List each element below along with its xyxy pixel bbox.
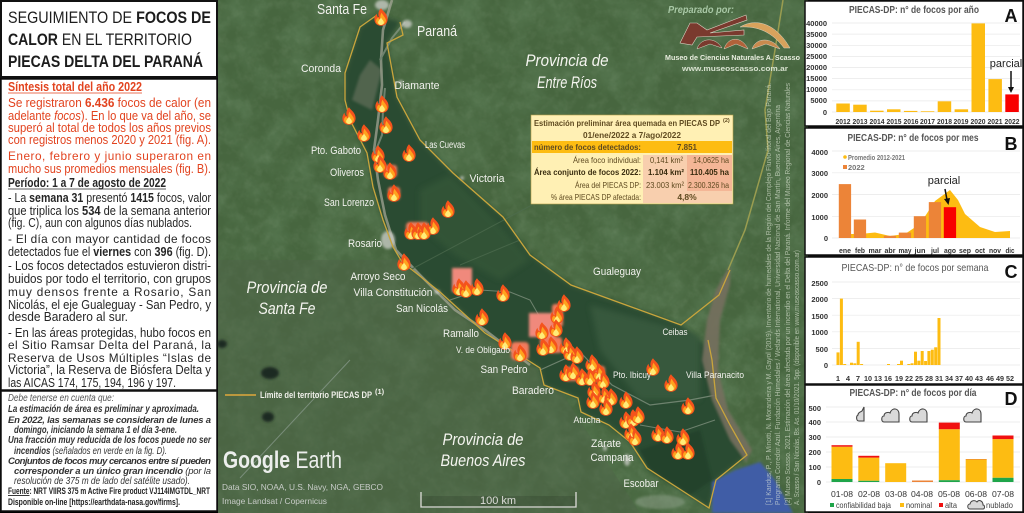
panel: notes and source: Fuente: NRT VIIRS 375 m Active Fire product VJ114IMGTDL_NRT bbox=[8, 486, 210, 496]
legend: boundary line: Límite del territorio PIECAS DP bbox=[260, 390, 372, 400]
panel: title bbox=[1, 1, 217, 77]
text block: weekly bullets: Victoria”, la Reserva de Biósfera Delta y bbox=[8, 363, 212, 377]
panel: notes and source bbox=[1, 391, 217, 511]
info table: estimated burned area bbox=[531, 115, 733, 204]
panel: notes and source: incendios (señalados en verde en la fig. D). bbox=[14, 445, 167, 457]
text block: weekly bullets: las AICAS 174, 175, 194, 196 y 197. bbox=[8, 376, 176, 390]
map labels: cities and provinces: Gualeguay bbox=[593, 266, 641, 278]
map labels: cities and provinces: Escobar bbox=[624, 478, 659, 490]
text block: annual synthesis paragraphs: mucho sus promedios mensuales (fig. B). bbox=[8, 162, 211, 176]
bar chart: years bbox=[836, 23, 1019, 112]
legend: confidence and cloud bbox=[830, 501, 1014, 510]
panel B: focos por mes bbox=[805, 128, 1023, 255]
bar chart: 2022 months bbox=[839, 184, 956, 238]
axis labels: weeks: 4 bbox=[846, 374, 851, 383]
info table: estimated burned area: número de focos detectados: bbox=[534, 142, 641, 152]
text block: weekly bullets: Reserva de Usos Múltiples “Islas de bbox=[8, 351, 211, 365]
axis labels: days: 05-08 bbox=[938, 489, 960, 499]
axis labels: days: 01-08 bbox=[831, 489, 853, 499]
map labels: cities and provinces: Santa Fe bbox=[317, 1, 367, 18]
scale bar: 100 km: 100 km bbox=[480, 495, 516, 507]
vertical references text: [2] Museo Scasso. 2021. Estimación del área afectada por un incendio en el Delta del Paraná. Informe del Museo Regional de Ciencias Naturales bbox=[785, 83, 792, 505]
axis labels: weeks: 16 bbox=[884, 374, 892, 383]
text block: weekly bullets: buidos por todo el territorio, con grupos bbox=[8, 272, 211, 286]
axis labels: weeks: 46 bbox=[986, 374, 994, 383]
axis labels: years: 2018 bbox=[937, 117, 952, 126]
map labels: cities and provinces: Arroyo Seco bbox=[350, 271, 406, 283]
annotation: parcial arrow: parcial bbox=[928, 175, 960, 187]
map labels: cities and provinces: Campana bbox=[590, 452, 634, 464]
map labels: cities and provinces: San Nicolás bbox=[396, 303, 448, 315]
panel: notes and source: Disponible on-line [https://earthdata-nasa.gov/firms]. bbox=[8, 497, 180, 507]
axis labels: weeks: 22 bbox=[905, 374, 913, 383]
panel A: focos por año: 30000 bbox=[806, 41, 827, 50]
annotation: parcial arrow: parcial bbox=[990, 58, 1022, 70]
text block: weekly bullets: detectados fue el viernes con 396 (fig. D). bbox=[8, 245, 211, 259]
axis labels: weeks bbox=[836, 374, 1014, 383]
panel: notes and source: Una fracción muy reducida de los focos puede no ser bbox=[8, 434, 212, 446]
axis labels: days bbox=[831, 489, 1014, 499]
map labels: cities and provinces: Ramallo bbox=[443, 328, 479, 340]
map labels: cities and provinces: Santa Fe bbox=[258, 299, 316, 318]
text block: weekly bullets: que triplica los 534 de la semana anterior bbox=[8, 204, 211, 218]
fire markers bbox=[342, 8, 695, 460]
axis labels: weeks: 34 bbox=[945, 374, 954, 383]
axis labels: weeks: 13 bbox=[874, 374, 882, 383]
panel B: focos por mes: B bbox=[1004, 134, 1018, 154]
panel D: focos por día: 300 bbox=[808, 433, 821, 442]
icons: cloudy days bbox=[857, 407, 981, 422]
panel: notes and source: domingo, iniciando la semana 1 el día 3-ene. bbox=[14, 424, 177, 436]
axis labels: weeks: 7 bbox=[856, 374, 860, 383]
info table: estimated burned area: 4,8% bbox=[677, 192, 697, 202]
axis labels: years: 2014 bbox=[870, 117, 885, 126]
panel: notes and source: Debe tenerse en cuenta que: bbox=[8, 392, 114, 404]
panel A: focos por año: 40000 bbox=[806, 19, 827, 28]
info table: estimated burned area: 110.405 ha bbox=[690, 167, 729, 177]
panel C: focos por semana: C bbox=[1004, 262, 1018, 282]
info table: estimated burned area: (2) bbox=[723, 118, 730, 124]
logo shape: brown animal bbox=[680, 15, 747, 45]
panel: title: CALOR EN EL TERRITORIO bbox=[8, 30, 192, 49]
axis labels: years: 2021 bbox=[988, 117, 1002, 126]
map labels: cities and provinces: Villa Constitución bbox=[354, 287, 432, 299]
Google Earth watermark and credits: Data SIO, NOAA, U.S. Navy, NGA, GEBCO bbox=[222, 482, 383, 492]
credit logo: Museo Scasso bbox=[665, 4, 800, 73]
map labels: cities and provinces: San Pedro bbox=[480, 364, 528, 376]
info table: estimated burned area: 23.003 km² bbox=[646, 180, 684, 190]
stacked bar chart: days bbox=[832, 423, 1014, 482]
panel D: focos por día: PIECAS-DP: n° de focos por día bbox=[850, 387, 977, 399]
text block: annual synthesis paragraphs: Se registraron 6.436 focos de calor (en bbox=[8, 96, 211, 110]
axis labels: weeks: 10 bbox=[864, 374, 872, 383]
map labels: cities and provinces: Pto. Gaboto bbox=[311, 145, 361, 157]
panel: title: PIECAS DELTA DEL PARANÁ bbox=[8, 52, 203, 71]
axis labels: months: dic bbox=[1006, 246, 1014, 255]
axis labels: years: 2012 bbox=[836, 117, 850, 126]
text block: annual synthesis paragraphs bbox=[8, 96, 211, 176]
panel: notes and source: corresponder a un único gran incendio (por la bbox=[14, 466, 211, 477]
Google Earth watermark and credits: Image Landsat / Copernicus bbox=[222, 496, 327, 506]
axis labels: weeks: 49 bbox=[996, 374, 1004, 383]
panel C: focos por semana bbox=[805, 257, 1023, 384]
text block: weekly bullets: muy densos frente a Rosario, San bbox=[8, 285, 211, 299]
text block: annual synthesis paragraphs: adelante focos). En lo que va del año, se bbox=[8, 109, 211, 123]
map labels: cities and provinces: Entre Ríos bbox=[537, 73, 597, 92]
panel C: focos por semana: 500 bbox=[815, 345, 828, 354]
text block: weekly bullets: (fig. C), aun con algunos días nublados. bbox=[8, 216, 192, 230]
axis labels: months: oct bbox=[975, 246, 985, 255]
text block: weekly bullets: - El día con mayor cantidad de focos bbox=[8, 232, 211, 246]
panel D: focos por día bbox=[805, 385, 1023, 512]
map labels: cities and provinces: Atucha bbox=[574, 415, 601, 426]
Google Earth watermark and credits: Google Earth bbox=[223, 447, 342, 474]
text block: annual synthesis paragraphs: con registros menos 2020 y 2021 (fig. A). bbox=[8, 133, 211, 147]
Google Earth watermark and credits bbox=[222, 447, 383, 506]
axis labels: months: ago bbox=[944, 246, 956, 255]
axis labels: years: 2022 bbox=[1004, 117, 1020, 126]
panel: notes and source: Conjuntos de focos muy cercanos entre sí pueden bbox=[8, 456, 211, 467]
legend: boundary line: (1) bbox=[375, 387, 385, 396]
axis labels: years bbox=[836, 117, 1020, 126]
annotation: parcial arrow bbox=[928, 175, 960, 205]
map labels: cities and provinces: V. de Obligado bbox=[456, 345, 510, 356]
info table: estimated burned area: 1.104 km² bbox=[648, 167, 684, 177]
map labels: cities and provinces: Provincia de bbox=[442, 430, 524, 449]
legend: confidence and cloud: alta bbox=[945, 501, 958, 510]
legend: month chart: 2022 bbox=[848, 163, 865, 172]
panel D: focos por día: 100 bbox=[808, 463, 821, 472]
panel A: focos por año: 15000 bbox=[806, 74, 827, 83]
axis labels: days: 07-08 bbox=[992, 489, 1014, 499]
axis labels: weeks: 37 bbox=[955, 374, 963, 383]
map labels: cities and provinces: Buenos Aires bbox=[440, 451, 526, 470]
axis labels: months: mar bbox=[868, 246, 882, 255]
text block: weekly bullets: - La semana 31 presentó 1415 focos, valor bbox=[8, 191, 211, 205]
axis labels: weeks: 28 bbox=[925, 374, 933, 383]
vertical references text bbox=[766, 83, 801, 505]
axis labels: years: 2017 bbox=[920, 117, 935, 126]
text block: weekly bullets: - En las áreas protegidas, hubo focos en bbox=[8, 326, 211, 340]
vertical references text: [1] Kandus, P., P. Minotti, N. Morandeira y M. Gayol (2019). Inventario de humedales de la Región del Complejo Fluvio-litoral del Bajo Paraná. bbox=[766, 83, 773, 505]
credit logo: Museo Scasso: www.museoscasso.com.ar bbox=[681, 64, 788, 73]
panel A: focos por año: A bbox=[1004, 6, 1018, 26]
panel B: focos por mes: 3000 bbox=[811, 169, 828, 178]
legend: confidence and cloud: nublado bbox=[986, 501, 1014, 510]
panel A: focos por año: 10000 bbox=[806, 85, 827, 94]
map labels: cities and provinces: Coronda bbox=[301, 63, 342, 75]
panel C: focos por semana: PIECAS-DP: n° de focos por semana bbox=[842, 262, 989, 274]
panel: synthesis text bbox=[1, 79, 217, 390]
axis labels: years: 2013 bbox=[852, 117, 868, 126]
axis labels: weeks: 19 bbox=[895, 374, 903, 383]
panel B: focos por mes: 2000 bbox=[811, 191, 828, 200]
info table: estimated burned area: Área conjunto de focos 2022: bbox=[534, 167, 641, 177]
map: satellite view of the Paraná delta bbox=[217, 0, 808, 513]
text block: weekly bullets bbox=[8, 191, 212, 390]
info table: estimated burned area: 2.300.326 ha bbox=[688, 180, 729, 190]
panel C: focos por semana: 2500 bbox=[811, 279, 828, 288]
heading: annual synthesis: Síntesis total del año 2022 bbox=[8, 80, 142, 94]
panel B: focos por mes: 1000 bbox=[811, 213, 828, 222]
panel: title: SEGUIMIENTO DE FOCOS DE bbox=[8, 8, 211, 27]
panel D: focos por día: D bbox=[1004, 389, 1018, 409]
map labels: cities and provinces: Villa Paranacito bbox=[686, 370, 744, 381]
panel C: focos por semana: 1500 bbox=[811, 312, 828, 321]
axis labels: years: 2016 bbox=[904, 117, 918, 126]
panel B: focos por mes: 0 bbox=[824, 234, 828, 243]
axis labels: days: 02-08 bbox=[858, 489, 880, 499]
legend: month chart: Promedio 2012-2021 bbox=[848, 153, 905, 162]
legend: confidence and cloud: nominal bbox=[906, 501, 932, 510]
axis labels: weeks: 1 bbox=[836, 374, 840, 383]
panel A: focos por año: 0 bbox=[823, 108, 827, 117]
panel D: focos por día: 500 bbox=[808, 404, 821, 413]
axis labels: weeks: 25 bbox=[915, 374, 923, 383]
info table: estimated burned area: Estimación preliminar área quemada en PIECAS DP bbox=[534, 118, 720, 128]
map labels: cities and provinces: San Lorenzo bbox=[324, 197, 374, 209]
credit logo: Museo Scasso: Preparado por: bbox=[668, 4, 734, 16]
axis labels: weeks: 31 bbox=[935, 374, 943, 383]
panel C: focos por semana: 1000 bbox=[811, 328, 828, 337]
map labels: cities and provinces: Baradero bbox=[512, 385, 554, 397]
text block: weekly bullets: - Los focos detectados estuvieron distri- bbox=[8, 259, 211, 273]
map labels: cities and provinces: Ceibas bbox=[662, 327, 688, 338]
info table: estimated burned area: % área PIECAS DP afectada: bbox=[551, 192, 641, 202]
axis labels: months: ene bbox=[839, 246, 851, 255]
panel A: focos por año: 25000 bbox=[806, 52, 827, 61]
area chart: average 2012-2021 bbox=[845, 190, 1010, 238]
axis labels: years: 2019 bbox=[954, 117, 968, 126]
axis labels: years: 2015 bbox=[886, 117, 902, 126]
info table: estimated burned area: 0,141 km² bbox=[650, 155, 683, 165]
map labels: cities and provinces: Oliveros bbox=[330, 167, 364, 179]
text block: annual synthesis paragraphs: Enero, febrero y junio superaron en bbox=[8, 149, 211, 163]
axis labels: months: jun bbox=[914, 246, 926, 255]
map labels: cities and provinces: Victoria bbox=[470, 173, 505, 185]
axis labels: months: feb bbox=[855, 246, 865, 255]
panel: notes and source: En 2022, las semanas se consideran de lunes a bbox=[8, 415, 211, 426]
vertical references text: A. Scasso / San Nicolás, Bs. As. 01/10/2021. 5pp. (disponible en www.museoscasso.com.ar) bbox=[794, 250, 801, 505]
panel: notes and source: La estimación de área es preliminar y aproximada. bbox=[8, 403, 199, 415]
axis labels: days: 06-08 bbox=[965, 489, 987, 499]
map labels: cities and provinces: Pto. Ibicuy bbox=[613, 370, 651, 381]
map boundary: limit of PIECAS DP territory bbox=[345, 15, 747, 508]
axis labels: months: sep bbox=[959, 246, 971, 255]
legend: confidence and cloud: confiabilidad baja bbox=[836, 501, 891, 510]
logo shape: arches and wheat bbox=[697, 23, 790, 49]
panel B: focos por mes: PIECAS-DP: n° de focos por mes bbox=[848, 132, 979, 144]
panel D: focos por día: 0 bbox=[817, 478, 821, 487]
text block: annual synthesis paragraphs: superó al total de todos los años previos bbox=[8, 121, 211, 135]
scale bar: 100 km bbox=[421, 492, 576, 508]
text block: weekly bullets: Nicolás, el eje Gualeguay - San Pedro, y bbox=[8, 298, 212, 312]
axis labels: weeks: 52 bbox=[1006, 374, 1014, 383]
map labels: cities and provinces bbox=[246, 1, 744, 490]
map labels: cities and provinces: Diamante bbox=[394, 80, 440, 92]
panel D: focos por día: 200 bbox=[808, 448, 821, 457]
info table: estimated burned area: Área foco individual: bbox=[573, 155, 641, 165]
axis labels: months: abr bbox=[884, 246, 896, 255]
panel A: focos por año: 20000 bbox=[806, 63, 827, 72]
legend: month chart bbox=[843, 153, 905, 172]
panel D: focos por día: 400 bbox=[808, 418, 821, 427]
axis labels: weeks: 43 bbox=[975, 374, 983, 383]
axis labels: months bbox=[839, 246, 1014, 255]
panel C: focos por semana: 2000 bbox=[811, 295, 828, 304]
panel B: focos por mes: 4000 bbox=[811, 148, 828, 157]
panel C: focos por semana: 0 bbox=[824, 361, 828, 370]
info table: estimated burned area: 7.851 bbox=[677, 142, 697, 152]
text block: weekly bullets: desde Baradero al sur. bbox=[8, 310, 128, 324]
vertical references text: Programa Corredor Azul. Fundación Humedales / Wetlands International, Universidad Nacional de San Martín, Buenos Aires, Argentina bbox=[775, 105, 782, 505]
map labels: cities and provinces: Provincia de bbox=[526, 51, 608, 70]
map labels: cities and provinces: Paraná bbox=[417, 23, 458, 40]
panel: notes and source: resolución de 375 m de lado del satélite usado). bbox=[14, 475, 190, 487]
credit logo: Museo Scasso: Museo de Ciencias Naturales A. Scasso bbox=[665, 53, 800, 62]
axis labels: months: may bbox=[898, 246, 912, 255]
map labels: cities and provinces: Zárate bbox=[591, 438, 621, 450]
panel A: focos por año: 35000 bbox=[806, 30, 827, 39]
panel A: focos por año: 5000 bbox=[810, 96, 827, 105]
panel A: focos por año bbox=[805, 1, 1023, 126]
axis labels: years: 2020 bbox=[970, 117, 986, 126]
panel A: focos por año: PIECAS-DP: n° de focos por año bbox=[849, 4, 979, 16]
axis labels: months: nov bbox=[989, 246, 1002, 255]
annotation: parcial arrow bbox=[990, 58, 1022, 93]
axis labels: weeks: 40 bbox=[965, 374, 973, 383]
axis labels: days: 04-08 bbox=[911, 489, 933, 499]
info table: estimated burned area: Área del PIECAS DP: bbox=[575, 180, 641, 190]
bar chart: weeks bbox=[836, 299, 940, 365]
axis labels: months: jul bbox=[930, 246, 939, 255]
heading: weekly period: Período: 1 a 7 de agosto de 2022 bbox=[8, 176, 166, 190]
info table: estimated burned area: 01/ene/2022 a 7/ago/2022 bbox=[583, 130, 681, 140]
axis labels: days: 03-08 bbox=[885, 489, 907, 499]
legend: boundary line bbox=[225, 387, 385, 400]
map labels: cities and provinces: Las Cuevas bbox=[425, 140, 465, 151]
text block: weekly bullets: el Sitio Ramsar Delta del Paraná, la bbox=[8, 338, 211, 352]
map labels: cities and provinces: Provincia de bbox=[246, 278, 328, 297]
map labels: cities and provinces: Rosario bbox=[348, 238, 382, 250]
info table: estimated burned area: 14,0625 ha bbox=[693, 155, 729, 165]
